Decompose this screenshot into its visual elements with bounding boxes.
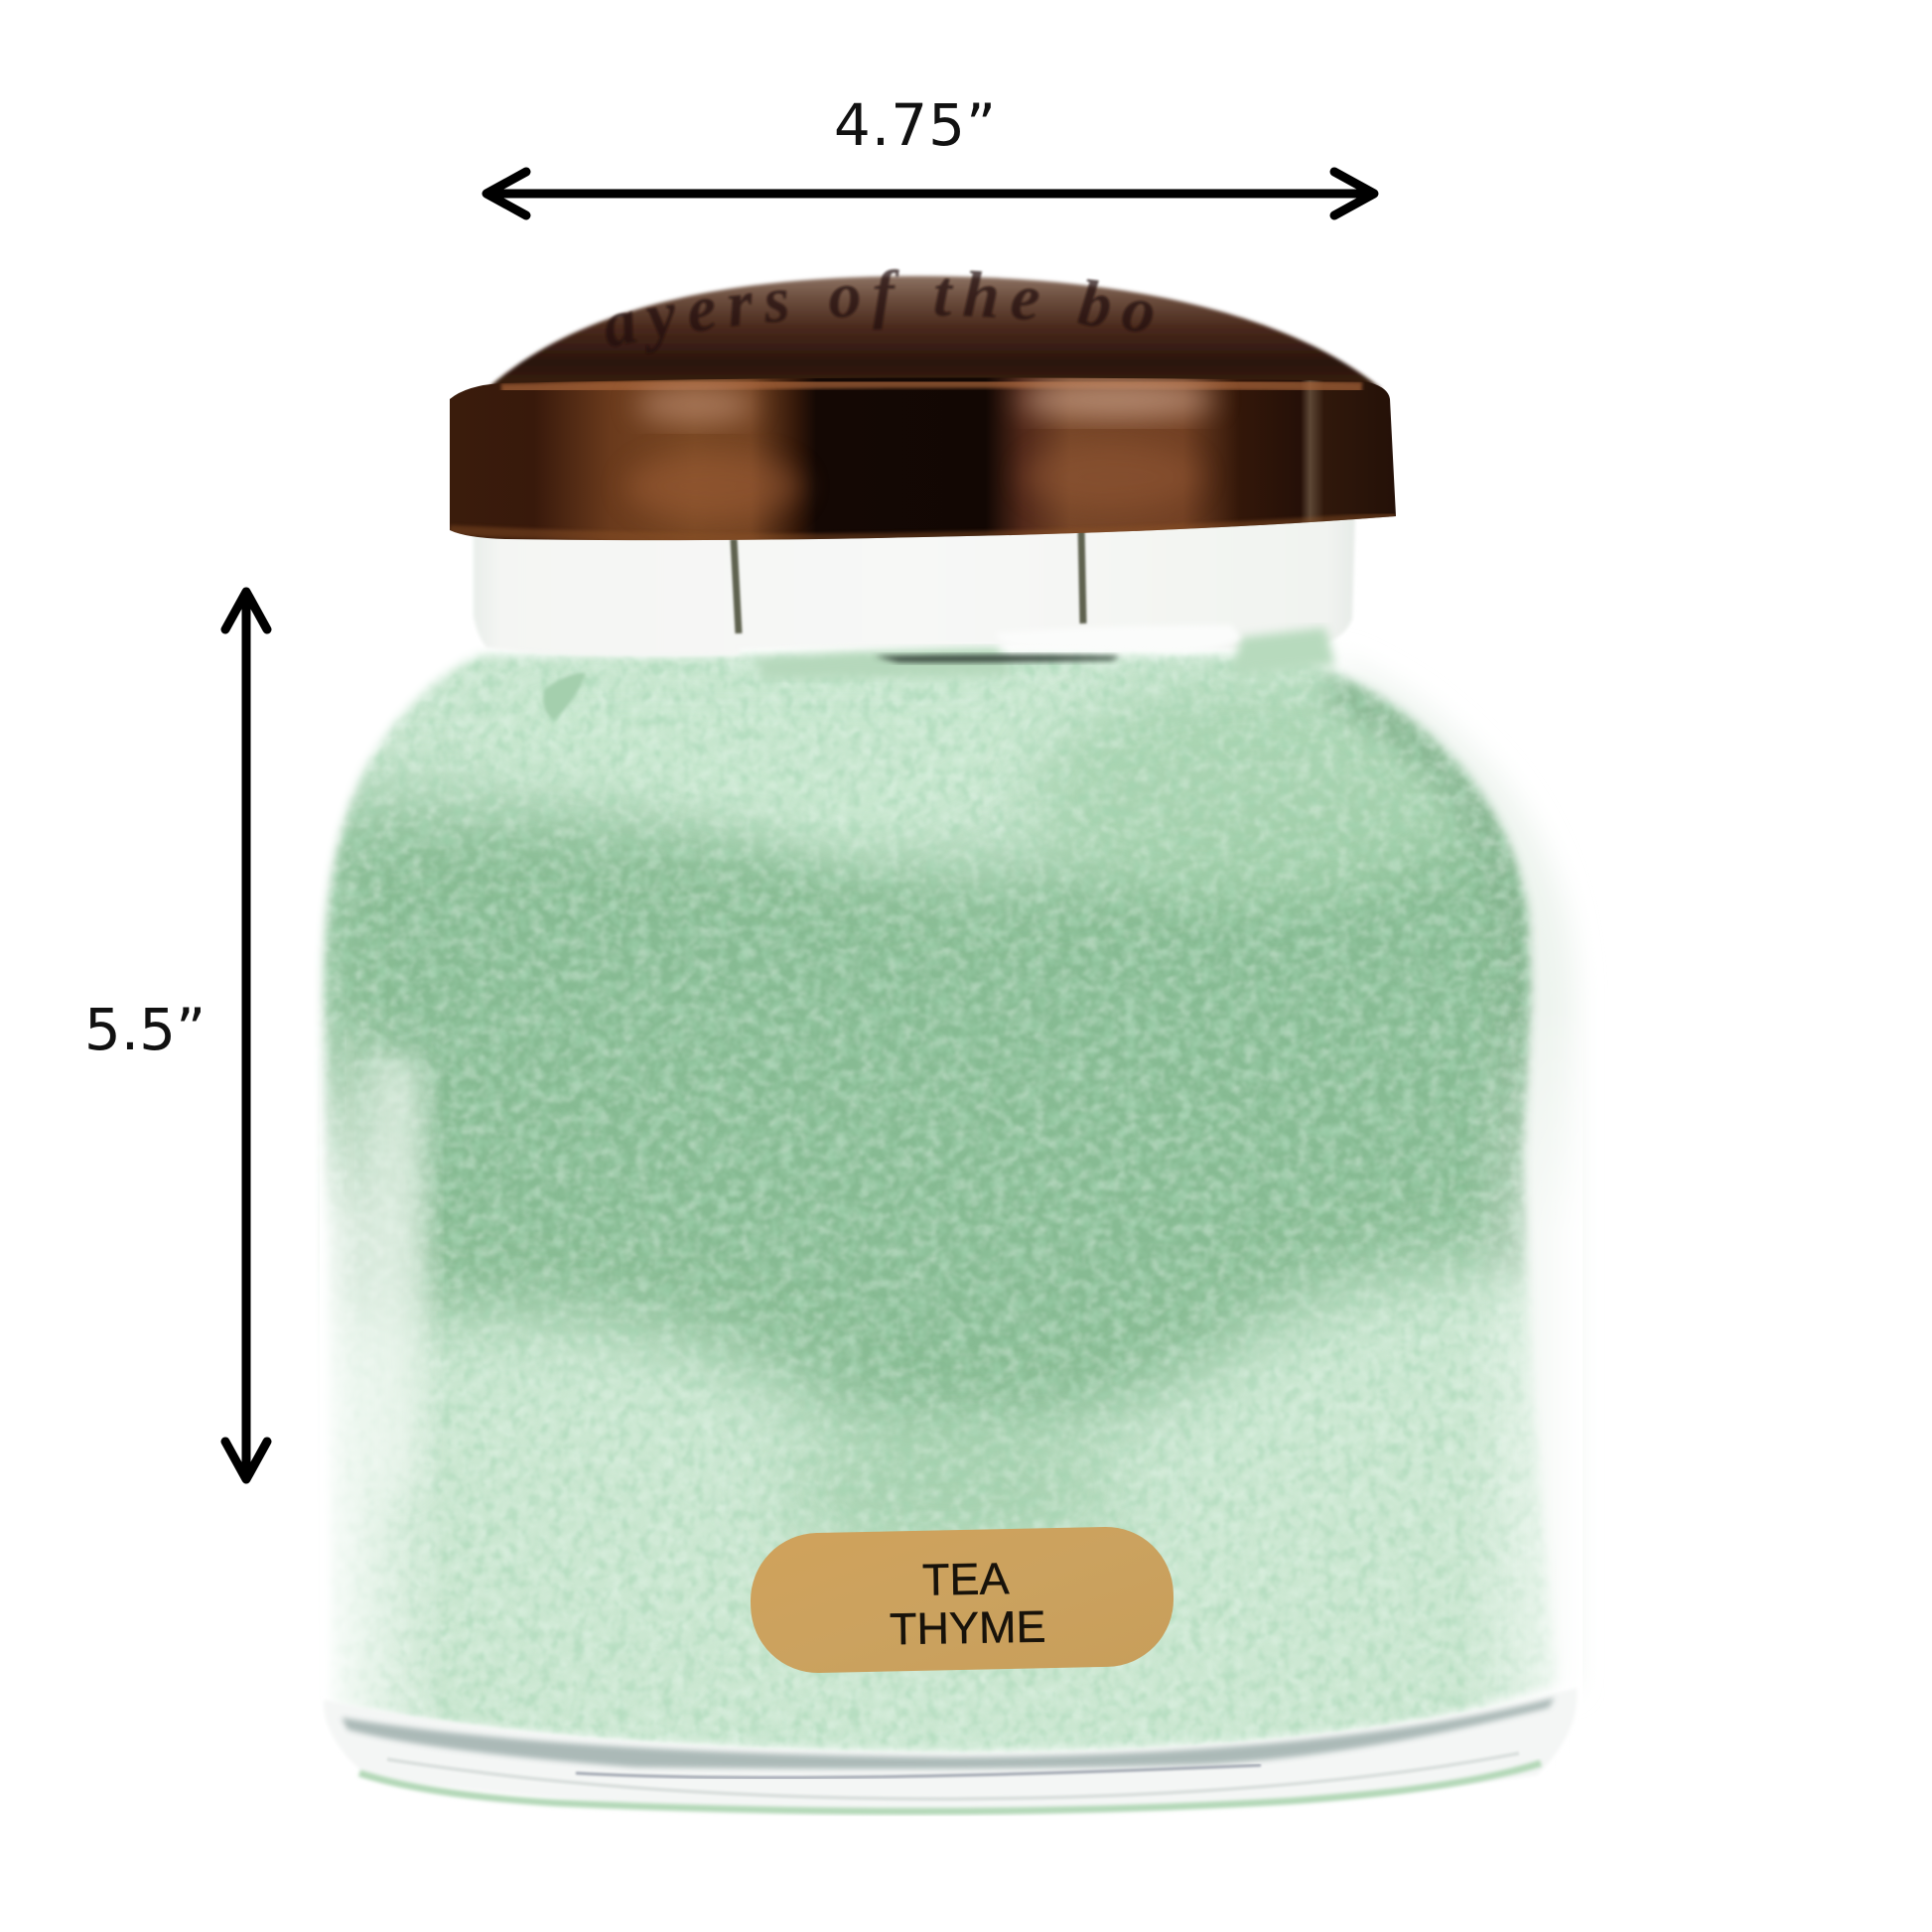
rim highlight lower right — [1023, 443, 1201, 510]
lid dome — [484, 276, 1382, 391]
wicks — [734, 526, 1083, 633]
lid engraved script: ayers of the bo — [606, 268, 1154, 353]
height label: 5.5” — [84, 996, 206, 1063]
label text TEA: TEA — [922, 1553, 1010, 1605]
wax top lighter zone — [618, 782, 907, 868]
jar neck glass — [474, 511, 1355, 679]
rim highlight right — [1018, 382, 1216, 418]
bottom dark band — [342, 1698, 1555, 1769]
wax upper right tone — [1033, 685, 1469, 903]
copper lid — [450, 268, 1396, 540]
wax shoulder dent — [543, 673, 586, 721]
width label: 4.75” — [834, 91, 997, 159]
candle wax — [298, 635, 1608, 1787]
jar glass body — [1330, 655, 1575, 1688]
rim top copper line — [501, 382, 1362, 389]
bottom glass tint — [324, 1688, 1577, 1813]
gold scent label — [750, 1526, 1174, 1674]
bottom thin reflection — [576, 1765, 1261, 1777]
lid rim — [450, 377, 1396, 540]
wax left dark line — [346, 1042, 349, 1047]
neck green wax seen through glass — [1231, 627, 1335, 675]
lid rim highlights — [450, 382, 1396, 538]
glass highlight on edges — [318, 635, 1588, 1827]
neck white wax meniscus — [996, 625, 1241, 651]
bottom green edge — [359, 1763, 1541, 1812]
arrow: width dimension — [486, 172, 1374, 215]
jar bottom glass — [324, 1688, 1577, 1813]
wax bottom lighter zone — [298, 1311, 1588, 1787]
rim bottom copper line — [450, 516, 1396, 538]
wax left streak — [369, 1052, 427, 1489]
label plate — [750, 1526, 1174, 1674]
neck mid wax band — [755, 647, 1013, 679]
rim highlight lower left — [625, 453, 804, 520]
rim highlight left — [635, 387, 755, 423]
arrow: height dimension — [225, 592, 267, 1479]
wax light speckle texture — [324, 659, 1533, 1747]
label text THYME: THYME — [890, 1601, 1046, 1654]
wax shoulder right dark edge — [1330, 685, 1517, 1271]
wax label shadow tone — [775, 1435, 1132, 1535]
wax dark speckle texture — [345, 655, 1543, 1751]
bottom second reflection — [387, 1753, 1519, 1799]
wax base colour — [324, 651, 1527, 1744]
wax dark green band — [298, 803, 1579, 1441]
neck dark contact line — [874, 655, 1120, 662]
